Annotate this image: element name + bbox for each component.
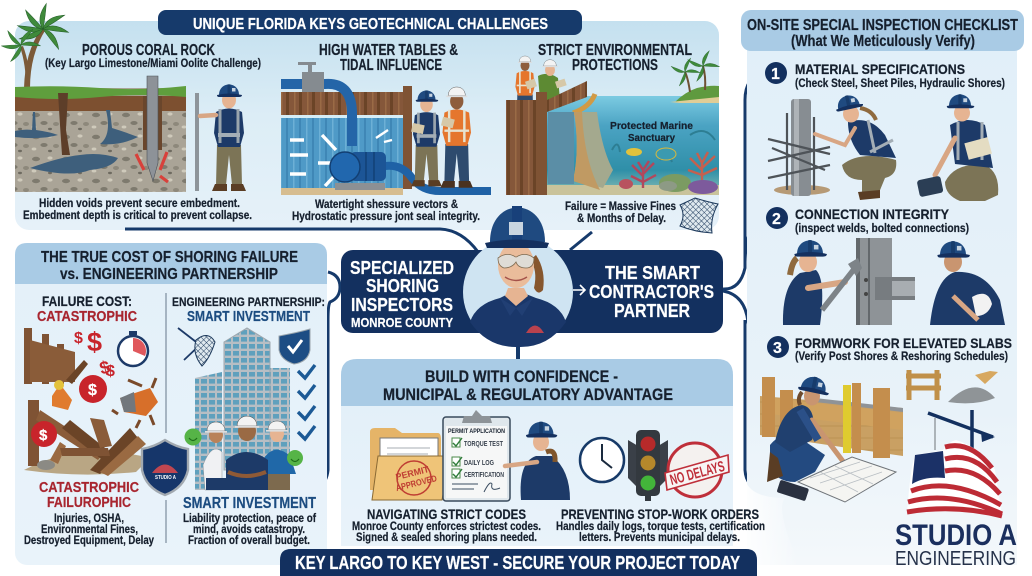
connector lines [125, 73, 767, 491]
icon: coin two [31, 421, 57, 447]
illustration: kneeling inspector with plans [767, 374, 896, 502]
heading: high water tables: TIDAL INFLUENCE [340, 57, 442, 74]
text: specialized shoring inspectors: INSPECTORS [351, 295, 453, 315]
illustration: engineering team [203, 416, 296, 490]
item 1: material specifications [765, 61, 1005, 201]
text: specialized shoring inspectors: SHORING [366, 276, 439, 296]
icons: falling money: $ [87, 327, 102, 357]
text: specialized shoring inspectors: MONROE COUNTY [351, 315, 453, 330]
illustration: inspector with probe rod [195, 84, 246, 191]
heading: environmental protections [538, 42, 692, 74]
text: navigating strict codes: NAVIGATING STRICT CODES [367, 506, 526, 522]
heading: failure cost: FAILURE COST: [42, 293, 132, 309]
header: checklist: (What We Meticulously Verify) [791, 33, 975, 50]
icon: traffic light [628, 430, 668, 501]
label: protected marine sanctuary: Sanctuary [628, 132, 675, 144]
heading: engineering partnership: ENGINEERING PARTNERSHIP: [172, 295, 325, 309]
number badge 2 [766, 207, 788, 229]
heading: material specs [795, 61, 1005, 90]
illustration: inspectors on wall [514, 56, 567, 124]
text: smart contractor's partner: CONTRACTOR'S [589, 282, 714, 302]
center banner [341, 206, 723, 347]
text: smart investment: Fraction of overall budget. [188, 535, 310, 547]
item 2: connection integrity [766, 206, 1005, 325]
icon: coin one: $ [88, 382, 97, 399]
avatar: lead inspector [463, 206, 573, 347]
heading: material specs: (Check Steel, Sheet Piles, Hydraulic Shores) [795, 78, 1005, 90]
illustration: permit folder: PERMIT [395, 464, 430, 482]
icons: check marks [298, 365, 315, 439]
title banner: geotechnical challenges: UNIQUE FLORIDA KEYS GEOTECHNICAL CHALLENGES [193, 16, 548, 33]
text: smart investment: Liability protection, peace of [183, 513, 316, 525]
caption: hidden voids: Hidden voids prevent secure embedment. [39, 198, 240, 210]
text: preventing stop-work orders: letters. Prevents municipal delays. [579, 532, 740, 544]
caption: massive fines [565, 201, 676, 225]
sub-panel: strict environmental protections [506, 42, 720, 233]
caption: massive fines: Failure = Massive Fines [565, 201, 676, 213]
heading: porous coral rock: POROUS CORAL ROCK [82, 42, 216, 59]
icon: net [680, 198, 718, 233]
header: true cost: vs. ENGINEERING PARTNERSHIP [60, 266, 278, 283]
text: preventing stop-work orders: Handles daily logs, torque tests, certification [556, 521, 765, 533]
illustration: kneeling inspector with tablet [917, 94, 998, 201]
item 3: formwork [760, 335, 1012, 502]
text: catastrophic failurophic: Environmental Fines, [41, 524, 138, 536]
heading: formwork [795, 335, 1012, 363]
header: true cost: THE TRUE COST OF SHORING FAILURE [41, 249, 298, 266]
header: true cost [15, 243, 327, 284]
sub-panel: porous coral rock [15, 42, 261, 222]
heading: high water tables: HIGH WATER TABLES & [319, 42, 458, 59]
text: catastrophic failurophic: CATASTROPHIC [39, 480, 139, 496]
text: catastrophic failurophic: Injuries, OSHA, [54, 513, 124, 525]
heading: high water tables [319, 42, 458, 74]
heading: formwork: (Verify Post Shores & Reshoring Schedules) [795, 351, 1008, 363]
icon: coin one [79, 375, 107, 403]
number badge 1: 1 [771, 66, 780, 83]
illustration: checklist clipboard: CERTIFICATION [464, 472, 504, 479]
icon: shield check [279, 329, 310, 364]
heading: porous coral rock [45, 42, 261, 70]
illustration: checklist clipboard: DAILY LOG [464, 458, 494, 467]
text: catastrophic failurophic: Destroyed Equipment, Delay [24, 535, 154, 547]
header: checklist [741, 10, 1024, 51]
number badge 2: 2 [772, 211, 781, 228]
heading: material specs: MATERIAL SPECIFICATIONS [795, 61, 965, 77]
text: smart contractor's partner [589, 263, 714, 321]
panel: on-site inspection checklist [741, 10, 1024, 570]
illustration: inspector with hard hat [930, 241, 1005, 325]
sub-panel: high water tables [281, 42, 491, 223]
text: smart contractor's partner: PARTNER [614, 301, 690, 321]
icon: coin two: $ [39, 427, 48, 444]
icons: smiley faces [184, 428, 303, 466]
illustration: silt curtain [573, 94, 613, 190]
heading: engineering partnership: SMART INVESTMENT [187, 309, 310, 325]
panel: true cost of shoring failure [15, 243, 327, 565]
illustration: inspector with wrench [783, 240, 862, 325]
illustration: collapsed shoring debris [24, 327, 158, 476]
panel: build with confidence [341, 359, 765, 546]
emblem: studio a shield: STUDIO A [155, 475, 176, 481]
illustration: checklist clipboard [443, 410, 510, 501]
heading: environmental protections: PROTECTIONS [572, 57, 658, 74]
text: preventing stop-work orders: PREVENTING STOP-WORK ORDERS [561, 506, 759, 522]
heading: failure cost: CATASTROPHIC [37, 309, 137, 325]
header: build with confidence [341, 359, 733, 406]
number badge 3: 3 [773, 340, 782, 357]
header: build with confidence: BUILD WITH CONFIDENCE - [425, 368, 618, 386]
icons: falling money: $ [106, 363, 115, 380]
logo: studio a engineering: ENGINEERING [895, 548, 1016, 570]
icons: falling money: $ [97, 357, 112, 379]
footer banner: call to action [280, 549, 757, 576]
text: specialized shoring inspectors [350, 258, 454, 330]
label: protected marine sanctuary [610, 120, 693, 144]
illustration: checklist clipboard: TORQUE TEST [464, 439, 503, 448]
text: smart investment [183, 495, 316, 547]
heading: connection integrity: CONNECTION INTEGRITY [795, 206, 950, 222]
illustration: steel pile with failure marks [136, 76, 168, 182]
illustration: dewatering pump and pipes [281, 62, 491, 191]
illustration: timber formwork [760, 377, 903, 458]
number badge 1 [765, 62, 787, 84]
illustration: inspector pointing [505, 422, 570, 500]
caption: hidden voids [23, 198, 252, 222]
illustration: two inspectors with clipboards [411, 87, 473, 188]
heading: connection integrity [795, 206, 969, 235]
illustration: permit folder: APPROVED [395, 473, 438, 493]
heading: connection integrity: (inspect welds, bolted connections) [795, 223, 969, 235]
icon: stopwatch with red sector [118, 331, 148, 366]
text: smart contractor's partner: THE SMART [605, 263, 700, 283]
icon: clock [580, 438, 624, 482]
text: navigating strict codes [352, 506, 541, 544]
stamp: no delays: NO DELAYS [668, 458, 727, 489]
number badge 3 [767, 336, 789, 358]
icon: butterfly net [178, 328, 215, 366]
emblem: studio a shield [142, 440, 188, 495]
heading: porous coral rock: (Key Largo Limestone/Miami Oolite Challenge) [45, 58, 261, 70]
text: catastrophic failurophic: FAILUROPHIC [47, 495, 131, 511]
arrow: to partner [573, 285, 585, 295]
text: smart investment: mind, avoids catastropy. [193, 524, 305, 536]
header: build with confidence: MUNICIPAL & REGULATORY ADVANTAGE [383, 386, 673, 404]
illustration: sheet pile wall and water [281, 86, 412, 195]
label: protected marine sanctuary: Protected Marine [610, 120, 693, 132]
illustration: skyscrapers [195, 328, 290, 490]
text: smart investment: SMART INVESTMENT [183, 495, 316, 512]
caption: massive fines: & Months of Delay. [577, 213, 666, 225]
heading: engineering partnership [172, 295, 325, 325]
illustration: checklist clipboard: PERMIT APPLICATION [448, 428, 505, 435]
illustration: sea and sanctuary [547, 50, 720, 195]
illustration: shoreline sheet piles [506, 81, 587, 195]
text: preventing stop-work orders [556, 506, 765, 544]
text: specialized shoring inspectors: SPECIALIZED [350, 258, 454, 278]
illustration: crouching inspector [815, 92, 896, 200]
illustration: ground cross-section with voids [15, 86, 186, 192]
illustration: palm trees [1, 3, 69, 88]
illustration: permit folder [370, 428, 450, 500]
text: navigating strict codes: Signed & sealed shoring plans needed. [356, 532, 537, 544]
logo: studio a engineering [895, 410, 1017, 570]
title banner: geotechnical challenges [158, 10, 582, 35]
caption: watertight: Hydrostatic pressure jont seal integrity. [292, 211, 480, 223]
icons: shoring frame and concrete [906, 370, 998, 403]
icons: falling money [74, 327, 115, 380]
caption: watertight: Watertight shessure vectors & [315, 199, 458, 211]
panel: Florida Keys geotechnical challenges [1, 3, 720, 233]
icons: falling money: $ [74, 330, 83, 347]
caption: hidden voids: Embedment depth is critical to prevent collapse. [23, 210, 252, 222]
heading: environmental protections: STRICT ENVIRONMENTAL [538, 42, 692, 59]
caption: watertight [292, 199, 480, 223]
footer banner: call to action: KEY LARGO TO KEY WEST - SECURE YOUR PROJECT TODAY [295, 553, 740, 573]
stamp: no delays [665, 443, 729, 497]
text: navigating strict codes: Monroe County enforces strictest codes. [352, 521, 541, 533]
illustration: steel column and beam [856, 238, 915, 325]
heading: failure cost [37, 293, 137, 325]
illustration: steel pile and rebar [768, 99, 830, 196]
text: catastrophic failurophic [24, 480, 154, 547]
